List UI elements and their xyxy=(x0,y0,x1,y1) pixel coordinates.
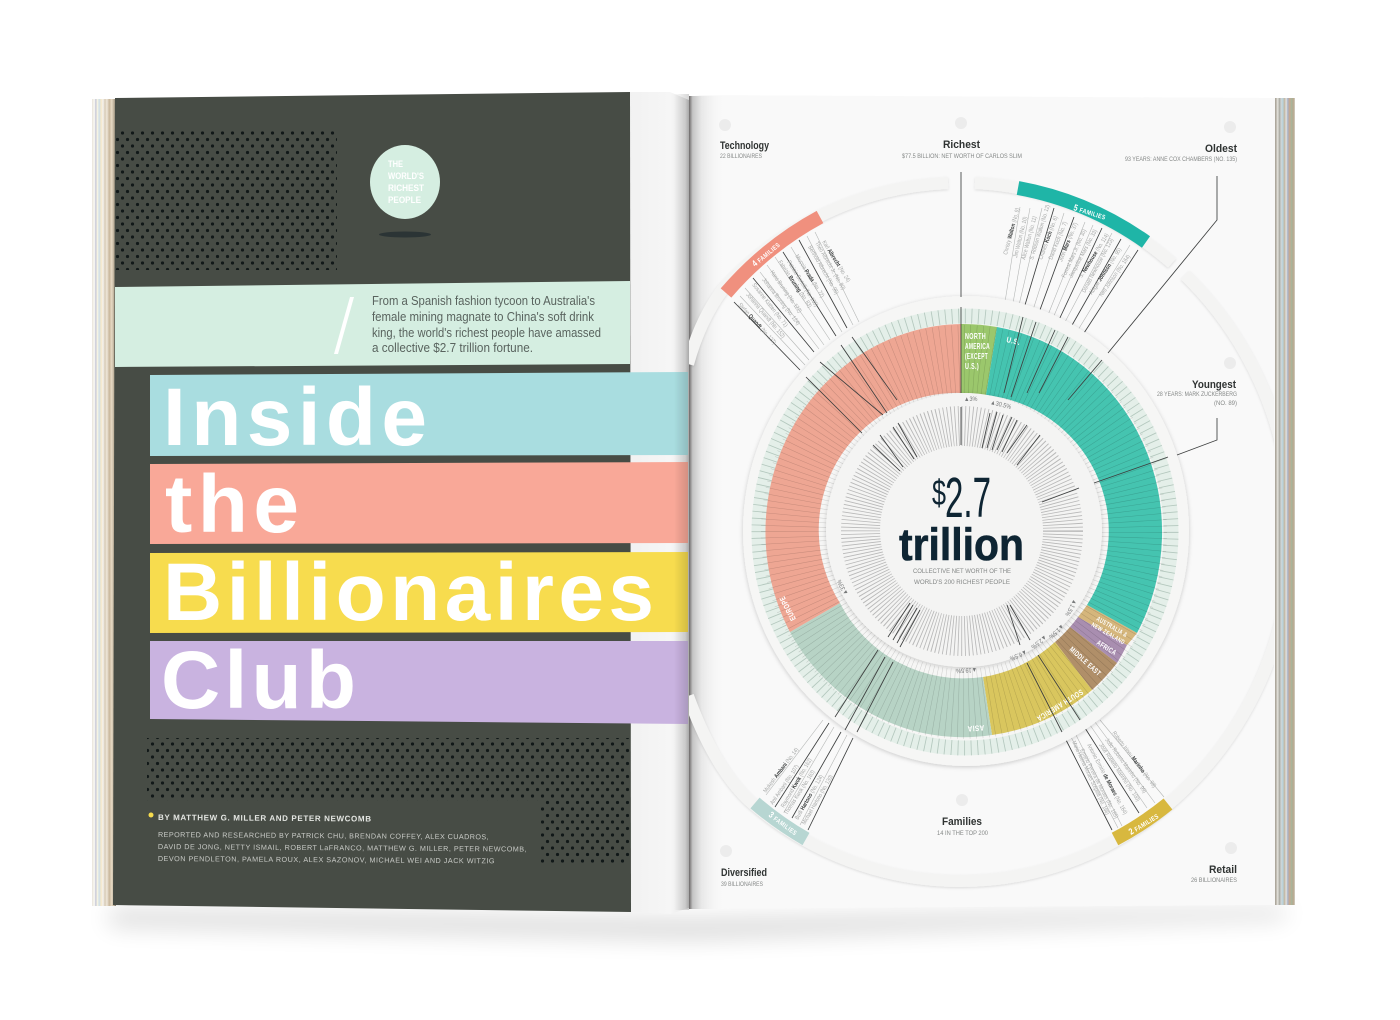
fan: top right names: Jacqueline Mars (No. 33) xyxy=(1068,229,1099,279)
callout: Retail: Retail xyxy=(1209,864,1237,876)
fan: top right names: Ned Johnson (No. 164) xyxy=(1098,254,1132,298)
credits: REPORTED AND RESEARCHED BY PATRICK CHU, BRENDAN COFFEY, ALEX CUADROS, xyxy=(158,830,489,841)
ring segment: South America xyxy=(983,642,1092,735)
callout: Oldest xyxy=(1125,121,1237,163)
gutter shading xyxy=(689,96,725,909)
family arc: 5 families xyxy=(1018,188,1146,242)
dot pattern top xyxy=(115,130,337,270)
byline: BY MATTHEW G. MILLER AND PETER NEWCOMB xyxy=(158,813,371,823)
fan: bottom right names: João Roberto Marinho (No. 99) xyxy=(1103,737,1147,795)
callout: Retail xyxy=(1191,842,1237,884)
ring segment: U.S. xyxy=(986,327,1162,633)
title band: Billionaires: Billionaires xyxy=(163,547,654,638)
fan: top right names: Forrest Mars Jr. (No. 30) xyxy=(1061,228,1088,279)
family arc: 4 families: 4 FAMILIES xyxy=(750,240,782,269)
dot pattern bottom xyxy=(147,738,630,865)
fan: bottom left names: Anil Ambani (No. 107) xyxy=(769,764,801,806)
region labels: MIDDLE EAST xyxy=(1067,646,1102,678)
badge: the world's richest people: RICHEST xyxy=(388,183,424,194)
family arc: 5 families: 5 FAMILIES xyxy=(1072,203,1107,222)
badge: the world's richest people: WORLD'S xyxy=(388,171,424,182)
fan: top right names: Jim Walton (No. 10) xyxy=(1013,216,1029,259)
fan: bottom left names: Mukesh Ambani (No. 14) xyxy=(762,747,801,794)
fan: top right names: S. Robson Walton (No. 12) xyxy=(1029,204,1052,261)
percent labels: ▲30.5% xyxy=(989,400,1012,411)
callout: Families xyxy=(937,794,988,837)
ring segment: Australia and New Zealand xyxy=(1078,605,1137,645)
fan: bottom right names: Maria Helena Moraes Scripilliti (No. 166) xyxy=(1070,740,1110,816)
badge shadow xyxy=(379,232,431,238)
ring segment: North America except U.S. xyxy=(961,324,997,395)
region labels xyxy=(779,332,1128,734)
callout: Richest: Richest xyxy=(943,139,980,151)
left page panel xyxy=(113,92,688,912)
fan: bottom right names xyxy=(1065,720,1164,830)
percent labels: ▲19.5% xyxy=(955,666,977,673)
total: $2.7 trillion: trillion xyxy=(899,519,1024,570)
fan: top left names: Susanne Klatten (No. 71) xyxy=(750,282,789,329)
ring segment: Europe xyxy=(765,324,961,632)
dark page background xyxy=(113,92,631,912)
title band: the: the xyxy=(165,459,299,550)
badge: the world's richest people xyxy=(370,145,440,219)
family arc: 3 families: 3 FAMILIES xyxy=(767,810,800,837)
percent labels: ▲1.5% xyxy=(1063,598,1078,617)
badge: the world's richest people: THE xyxy=(388,159,403,170)
badge: the world's richest people: PEOPLE xyxy=(388,195,421,206)
fan: top right names: Donald Newhouse (No. 123) xyxy=(1081,237,1115,294)
percent labels: ▲2.5% xyxy=(1029,633,1048,650)
byline xyxy=(148,812,527,866)
ring segment: Middle East xyxy=(1055,627,1117,690)
fan: top left names xyxy=(734,232,859,370)
fan: top left names: Johanna Quandt (No. 152) xyxy=(744,292,786,340)
total: $2.7 trillion: $ xyxy=(932,472,946,513)
region labels: U.S.) xyxy=(965,362,979,371)
fan: top left names: Theo Albrecht Jr. (No. 80) xyxy=(813,241,846,292)
region labels: AUSTRALIA & xyxy=(1095,616,1128,639)
family arc: 2 families: 2 FAMILIES xyxy=(1127,811,1160,837)
callout: Oldest: Oldest xyxy=(1205,143,1237,155)
fan: top right names: Christy Walton (No. 9) xyxy=(1003,207,1022,256)
callout: Families: Families xyxy=(942,816,982,828)
credits: DAVID DE JONG, NETTY ISMAIL, ROBERT LaFRANCO, MATTHEW G. MILLER, PETER NEWCOMB, xyxy=(158,842,527,854)
fan: top left names: Hans Bruning (No. 122) xyxy=(768,269,803,315)
right page edge stack xyxy=(1274,98,1295,905)
callout: Diversified: 39 BILLIONAIRES xyxy=(721,881,763,888)
fan: top left names: Berthold Albrecht (No. 95) xyxy=(806,245,839,296)
center disc xyxy=(880,446,1042,614)
region labels: ASIA xyxy=(967,723,985,734)
percent labels: ▲6.5% xyxy=(1008,648,1028,661)
total: $2.7 trillion: 2.7 xyxy=(945,466,991,530)
inner disc xyxy=(826,393,1102,667)
fan: top right names: David Koch (No. 7) xyxy=(1048,221,1069,261)
callout: Retail: 26 BILLIONAIRES xyxy=(1191,877,1237,884)
region labels: (EXCEPT xyxy=(965,352,988,361)
region labels: NORTH xyxy=(965,332,986,341)
region labels: AMERICA xyxy=(965,342,990,351)
fan: bottom right names: José Roberto Marinho (No. 100) xyxy=(1097,743,1141,803)
callout: Technology xyxy=(719,119,770,160)
credits xyxy=(158,830,527,866)
slash xyxy=(334,297,354,354)
category arcs xyxy=(688,183,1292,881)
fan: top left names: Miuccia Prada (No. 72) xyxy=(793,254,825,299)
callout: Diversified: Diversified xyxy=(721,867,767,879)
fan: top left names: Karl Albrecht (No. 24) xyxy=(820,240,851,284)
total: $2.7 trillion xyxy=(899,466,1024,586)
intro text xyxy=(372,293,601,355)
gutter strip of left page xyxy=(628,92,689,914)
family arc: 2 families xyxy=(1115,804,1168,839)
intro text: female mining magnate to China's soft drink xyxy=(372,309,594,324)
fan: top right names: Alice Walton (No. 11) xyxy=(1021,215,1039,261)
total: $2.7 trillion: COLLECTIVE NET WORTH OF THE xyxy=(913,568,1011,575)
region labels: NEW ZEALAND xyxy=(1090,622,1126,647)
callout: Richest: $77.5 BILLION: NET WORTH OF CARLOS SLIM xyxy=(902,153,1022,160)
callout: Oldest: 93 YEARS: ANNE COX CHAMBERS (NO. 135) xyxy=(1125,156,1237,163)
ring segment: Asia xyxy=(790,603,992,737)
region labels: U.S. xyxy=(1006,334,1021,347)
fan: top left names: Patrizio Bertelli (No. 135) xyxy=(785,260,819,308)
dark highlight lines in rings xyxy=(806,307,1102,732)
fan: top left names: Johanna Bruning (No. 124) xyxy=(760,277,801,327)
callout: Youngest xyxy=(1157,357,1237,407)
outer disc xyxy=(743,296,1189,766)
fan: bottom right names: Ermirio Pereira de Moraes (No. 165) xyxy=(1078,748,1119,820)
fan: bottom right names: Roberto Irineu Marinho (No. 98) xyxy=(1110,730,1157,790)
leader line: richest xyxy=(960,172,962,297)
intro band xyxy=(115,281,630,367)
title band: the xyxy=(150,459,688,550)
fan: top right names xyxy=(1003,204,1138,333)
region labels: EUROPE xyxy=(779,594,798,622)
magazine drop shadow xyxy=(110,908,1285,938)
title band: Club xyxy=(150,635,688,726)
region labels: AFRICA xyxy=(1095,639,1118,658)
callout: Diversified xyxy=(720,845,767,888)
fan: top left names: Stefan Quandt (No. 127) xyxy=(736,302,777,346)
fan: top right names: Charles Koch (No. 6) xyxy=(1038,215,1060,261)
callout: Technology: Technology xyxy=(720,140,770,152)
fan: bottom left names: Budi Hartono (No. 124) xyxy=(794,774,825,821)
fan: top right names: Abigail Johnson (No. 95) xyxy=(1088,247,1124,296)
family arc: 4 families xyxy=(726,217,820,293)
right page panel xyxy=(688,95,1292,909)
ring segment: Africa xyxy=(1070,617,1127,663)
fan: bottom left names: Raymond Kwok (No. 162) xyxy=(780,757,814,809)
callout: Youngest: Youngest xyxy=(1192,379,1236,391)
percent labels: ▲1.5% xyxy=(1047,622,1065,640)
leader line: oldest xyxy=(1108,176,1217,353)
left page edge stack xyxy=(92,99,116,906)
ring divider lines xyxy=(796,360,1132,704)
region labels: SOUTH AMERICA xyxy=(1035,687,1084,722)
credits: DEVON PENDLETON, PAMELA ROUX, ALEX SAZONOV, MICHAEL WEI AND JACK WITZIG xyxy=(158,854,495,865)
callout: Technology: 22 BILLIONAIRES xyxy=(720,153,762,160)
outer tick band xyxy=(759,316,1171,748)
callout: Richest xyxy=(902,117,1022,160)
inner tick ring xyxy=(861,426,1063,636)
page background xyxy=(689,95,1275,909)
percent labels: ▲33% xyxy=(836,578,850,596)
fan: bottom left names: Michael Hartono (No. 130) xyxy=(801,774,835,826)
fan: top right names: John Mars (No. 37) xyxy=(1058,222,1080,263)
intro text: a collective $2.7 trillion fortune. xyxy=(372,340,533,355)
total: $2.7 trillion: WORLD'S 200 RICHEST PEOPLE xyxy=(914,579,1010,586)
title band: Club: Club xyxy=(161,635,356,726)
family arc: 3 families xyxy=(755,803,806,839)
callout: Youngest: 28 YEARS: MARK ZUCKERBERG xyxy=(1157,391,1237,398)
fan: top right names: S. Newhouse (No. 114) xyxy=(1078,232,1111,279)
percent labels: ▲3% xyxy=(964,397,978,403)
callout: Youngest: (NO. 89) xyxy=(1214,400,1237,407)
gutter curl shading over bands xyxy=(674,94,689,910)
percent labels xyxy=(836,397,1078,673)
intro text: From a Spanish fashion tycoon to Australia's xyxy=(372,293,595,308)
fan: top left names: Fabrizio Bruning (No. 83) xyxy=(776,260,813,309)
intro text: king, the world's richest people have amassed xyxy=(372,325,601,340)
fan: bottom left names xyxy=(762,720,853,830)
dark highlight ticks in inner ring xyxy=(873,412,1079,647)
leader line: youngest xyxy=(1094,418,1217,483)
radial wealth chart xyxy=(743,296,1189,766)
fan: bottom left names: Thomas Kwok (No. 163) xyxy=(783,769,817,816)
fan: bottom right names: Antonio Ermirio de Moraes (No. 164) xyxy=(1085,743,1128,816)
title band: Inside: Inside xyxy=(163,372,427,463)
callout: Families: 14 IN THE TOP 200 xyxy=(937,830,988,837)
title band: Inside xyxy=(150,372,688,463)
